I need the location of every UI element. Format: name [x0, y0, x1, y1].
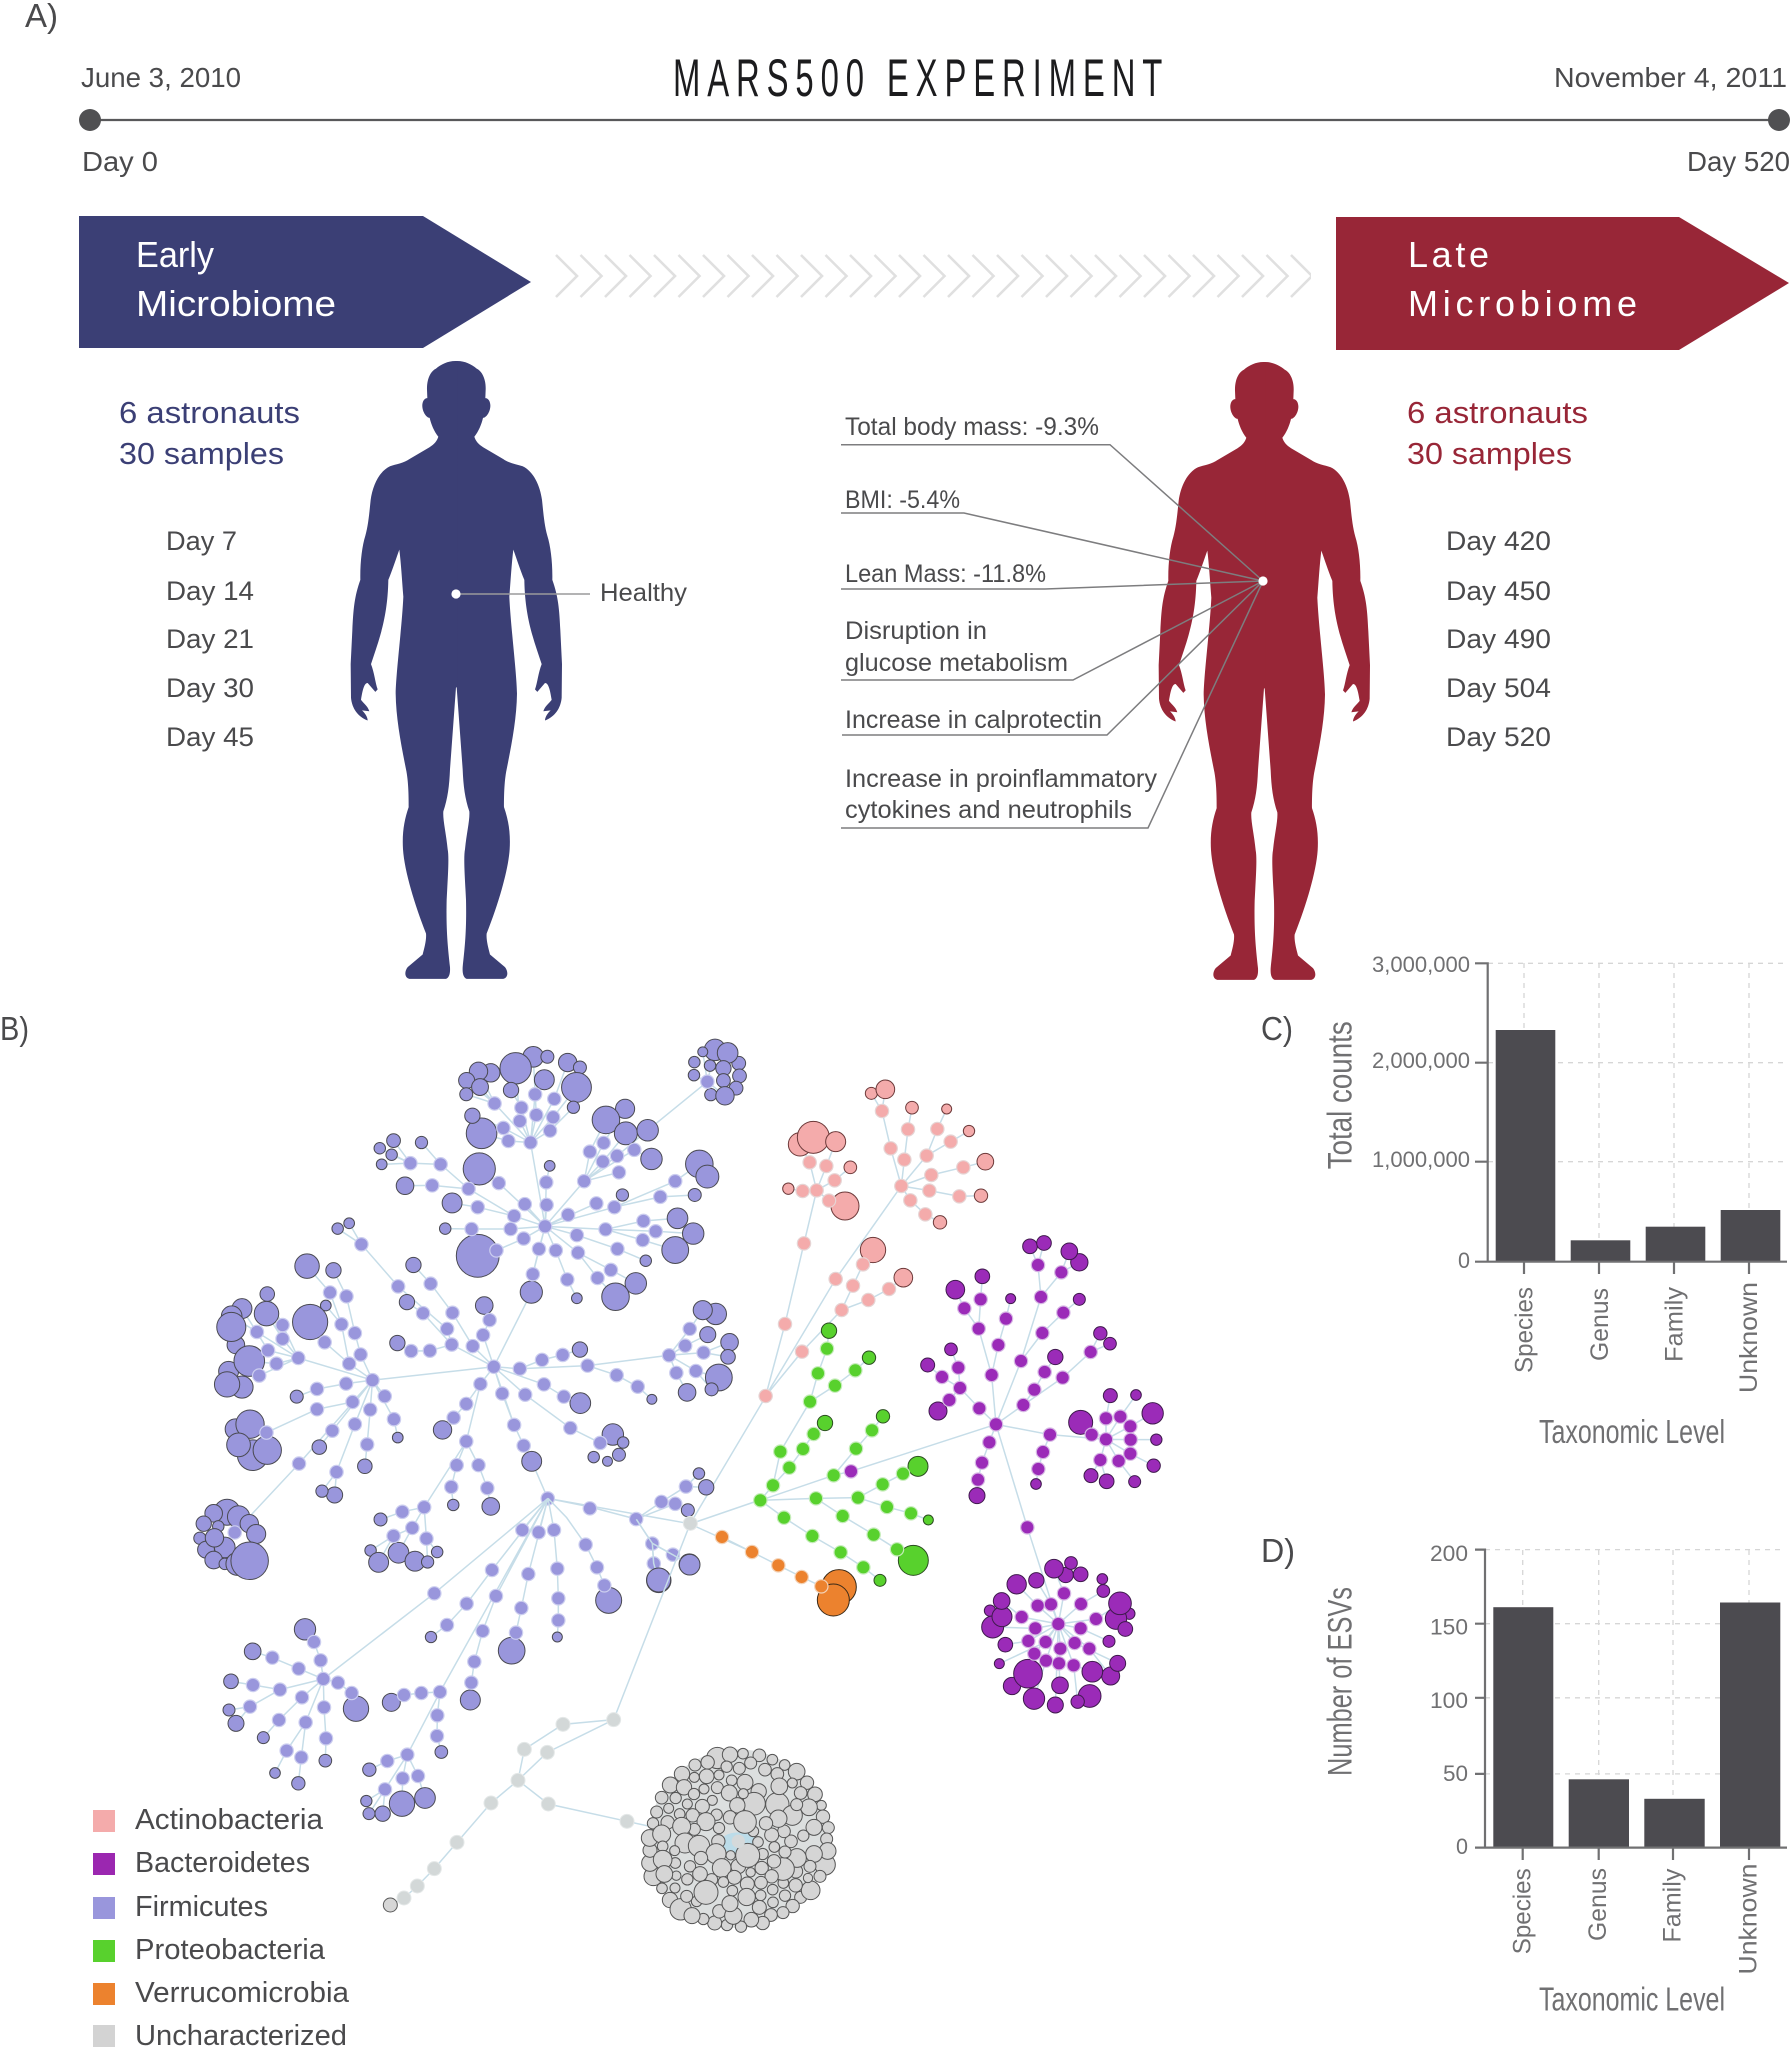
- actinobacteria internal nodes: [759, 1104, 970, 1403]
- timeline end date: November 4, 2011: [1554, 62, 1787, 93]
- early cohort text: 6 astronauts: [119, 395, 300, 430]
- verrucomicrobia branch: [715, 1530, 856, 1616]
- early sampling days: Day 30: [166, 673, 254, 703]
- legend: [93, 1804, 350, 2048]
- firmicutes upper branches: [194, 1039, 746, 1593]
- symptom labels: Lean Mass: -11.8%: [845, 560, 1046, 588]
- chart C x tick labels: [1511, 1282, 1763, 1393]
- bar chart D: number of ESVs: [1322, 1541, 1787, 2018]
- timeline axis: [90, 119, 1779, 121]
- symptom labels: Increase in proinflammatory: [845, 765, 1157, 793]
- chart D bars: [1493, 1602, 1780, 1848]
- proteobacteria leaf nodes: [817, 1323, 933, 1586]
- timeline: [79, 49, 1790, 177]
- firmicutes leaf nodes: [194, 1039, 746, 1593]
- legend: actinobacteria: Actinobacteria: [135, 1804, 324, 1836]
- chart C y tick labels: [1372, 952, 1470, 1273]
- actinobacteria branches: [759, 1080, 994, 1403]
- chart C x tick labels: Family: [1661, 1286, 1689, 1362]
- early sampling days: Day 14: [166, 576, 254, 606]
- chart D y tick labels: [1430, 1541, 1468, 1859]
- timeline start marker: [79, 109, 101, 131]
- chart C y tick labels: 0: [1458, 1248, 1470, 1273]
- uncharacterized chain: [383, 1516, 697, 1912]
- chart C y tick labels: 1,000,000: [1372, 1147, 1470, 1172]
- early microbiome arrow: Early: [136, 234, 214, 275]
- chart C x axis title: Taxonomic Level: [1539, 1413, 1725, 1450]
- chart C axes: [1475, 963, 1787, 1274]
- early sampling days: Day 45: [166, 722, 254, 752]
- early sampling days: Day 7: [166, 526, 237, 556]
- chart D x tick labels: Genus: [1584, 1868, 1612, 1941]
- late sampling days: [1446, 526, 1551, 752]
- early sampling days: Day 21: [166, 624, 254, 654]
- chart D y tick labels: 200: [1430, 1541, 1468, 1566]
- legend: proteobacteria: Proteobacteria: [135, 1934, 326, 1966]
- chart D grid: [1485, 1550, 1785, 1847]
- late microbiome arrow: [1336, 217, 1789, 350]
- chart C x tick labels: Species: [1511, 1287, 1539, 1373]
- chart C y tick labels: 3,000,000: [1372, 952, 1470, 977]
- symptom labels: Total body mass: -9.3%: [845, 413, 1099, 441]
- chart D x tick labels: Unknown: [1735, 1864, 1763, 1974]
- symptom labels: glucose metabolism: [845, 649, 1068, 677]
- symptom labels: Increase in calprotectin: [845, 706, 1102, 734]
- firmicutes lower branches: [223, 1498, 700, 1912]
- healthy callout: Healthy: [600, 579, 688, 607]
- chart D y axis title: Number of ESVs: [1322, 1587, 1360, 1776]
- bacteroidetes upper internal nodes: [935, 1258, 1137, 1486]
- symptom labels: cytokines and neutrophils: [845, 796, 1132, 824]
- late sampling days: Day 490: [1446, 624, 1551, 654]
- chart D x axis title: Taxonomic Level: [1539, 1981, 1725, 2018]
- bacteroidetes upper leaf nodes: [921, 1236, 1163, 1504]
- late microbiome arrow: Microbiome: [1408, 283, 1637, 324]
- early cohort text: 30 samples: [119, 436, 284, 471]
- phylogenetic network: [194, 1039, 1163, 1932]
- timeline start date: June 3, 2010: [81, 62, 241, 93]
- title: MARS500 EXPERIMENT: [673, 49, 1169, 108]
- chart D x tick labels: Species: [1509, 1868, 1537, 1954]
- chart C bars: [1496, 1030, 1780, 1262]
- bacteroidetes upper branches: [851, 1236, 1163, 1624]
- firmicutes internal nodes: [228, 1075, 714, 1570]
- legend: bacteroidetes: Bacteroidetes: [135, 1847, 310, 1879]
- early microbiome arrow: Microbiome: [136, 283, 336, 324]
- chevron band: [555, 254, 1311, 298]
- symptom labels: [845, 413, 1157, 824]
- bacteroidetes lower cluster: [982, 1521, 1135, 1713]
- uncharacterized cluster: [641, 1747, 836, 1932]
- late cohort text: [1407, 395, 1588, 471]
- chart D y tick labels: 50: [1443, 1761, 1468, 1786]
- early sampling days: [166, 526, 254, 752]
- chart C y axis title: Total counts: [1322, 1021, 1360, 1169]
- bar chart C: total counts: [1322, 952, 1787, 1450]
- proteobacteria branches: [715, 1323, 1135, 1713]
- legend: verrucomicrobia: Verrucomicrobia: [135, 1977, 350, 2009]
- chart C grid: [1488, 963, 1785, 1261]
- symptom leader lines: [841, 445, 1268, 828]
- symptom labels: BMI: -5.4%: [845, 486, 960, 514]
- chart C x tick labels: Genus: [1586, 1288, 1614, 1361]
- firmicutes lower internal nodes: [243, 1523, 611, 1796]
- purple linking node: [844, 1465, 858, 1478]
- late sampling days: Day 450: [1446, 576, 1551, 606]
- day 0 label: Day 0: [82, 146, 158, 177]
- connecting edges between phyla: [690, 1396, 766, 1552]
- chart D x tick labels: Family: [1659, 1868, 1687, 1943]
- early cohort text: [119, 395, 300, 471]
- late sampling days: Day 520: [1446, 722, 1551, 752]
- legend: firmicutes: Firmicutes: [135, 1891, 268, 1923]
- late cohort text: 6 astronauts: [1407, 395, 1588, 430]
- timeline end marker: [1768, 109, 1790, 131]
- chart C y tick labels: 2,000,000: [1372, 1048, 1470, 1073]
- chart D y tick labels: 100: [1430, 1688, 1468, 1713]
- healthy callout: [451, 579, 688, 607]
- actinobacteria leaf nodes: [783, 1080, 994, 1287]
- panel label D: D): [1261, 1532, 1295, 1569]
- chart D y tick labels: 150: [1430, 1614, 1468, 1640]
- healthy astronaut silhouette: [351, 361, 562, 979]
- late astronaut silhouette: [1159, 362, 1370, 980]
- chart D x tick labels: [1509, 1864, 1763, 1974]
- panel label B: B): [0, 1010, 29, 1047]
- firmicutes lower leaf nodes: [223, 1554, 700, 1821]
- late microbiome arrow: Late: [1408, 234, 1489, 275]
- proteobacteria internal nodes: [754, 1342, 918, 1574]
- day 520 label: Day 520: [1687, 146, 1790, 177]
- late sampling days: Day 504: [1446, 673, 1551, 703]
- early microbiome arrow: [79, 216, 531, 348]
- panel label C: C): [1261, 1010, 1293, 1047]
- late sampling days: Day 420: [1446, 526, 1551, 556]
- late cohort text: 30 samples: [1407, 436, 1572, 471]
- chart D y tick labels: 0: [1456, 1834, 1468, 1859]
- chart D axes: [1475, 1550, 1787, 1860]
- symptom labels: Disruption in: [845, 617, 987, 645]
- chart C x tick labels: Unknown: [1735, 1282, 1763, 1393]
